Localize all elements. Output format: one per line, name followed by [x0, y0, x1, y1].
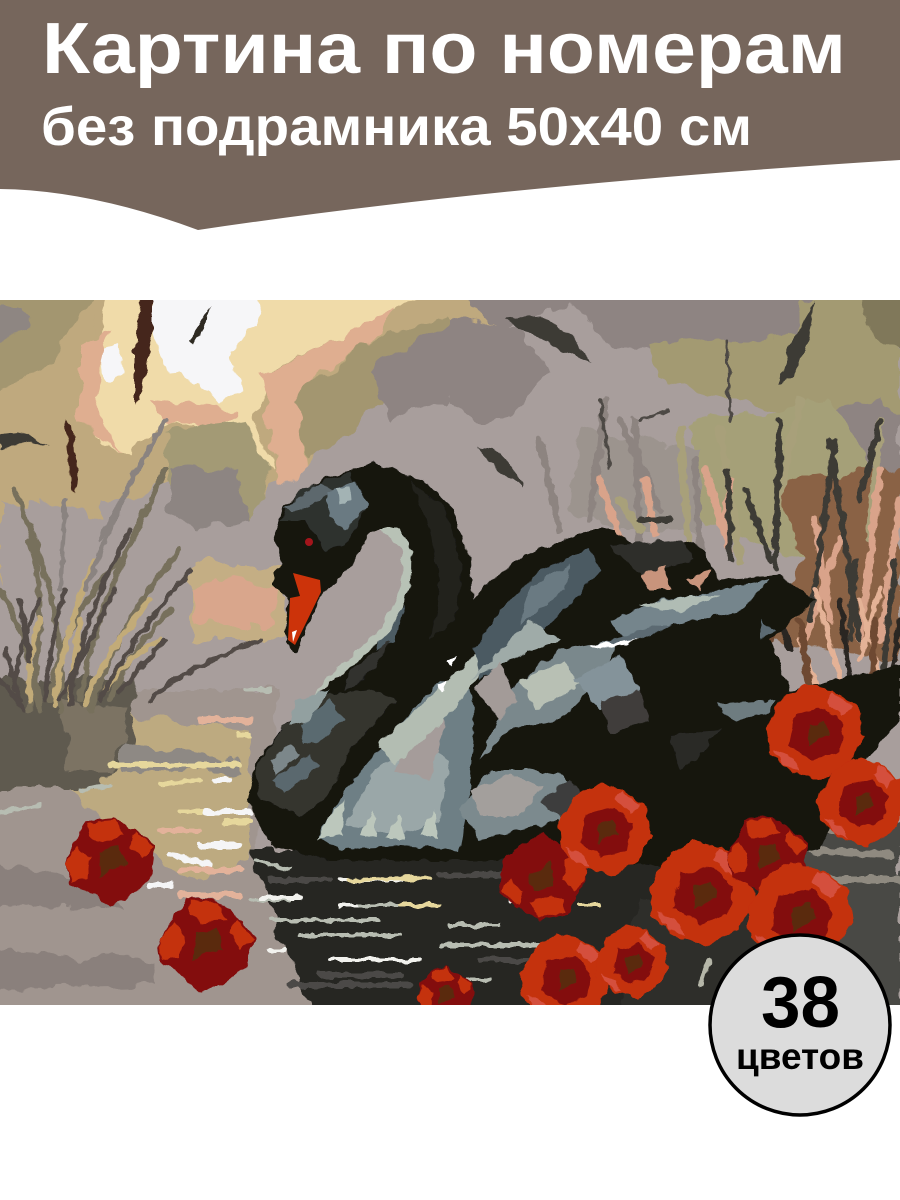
badge label: цветов	[736, 1036, 864, 1077]
breast feathers	[255, 690, 395, 815]
badge number: 38	[761, 963, 840, 1043]
head highlights	[280, 472, 365, 550]
fan of grey feathers	[318, 680, 475, 850]
neck pale rim	[310, 527, 412, 700]
swan	[248, 463, 900, 870]
white glints	[438, 656, 458, 692]
right reeds background	[540, 400, 700, 550]
flower	[649, 840, 755, 946]
left grass clump	[0, 470, 180, 710]
badge: 38 colours	[710, 935, 890, 1115]
flower	[746, 862, 854, 944]
sky and background colours	[0, 290, 900, 660]
flower	[727, 816, 807, 897]
header banner	[0, 0, 900, 230]
flower	[519, 933, 608, 1005]
reeds and grasses	[0, 340, 900, 710]
flower	[499, 832, 587, 920]
title: Картина по номерам	[42, 9, 846, 89]
subtitle: без подрамника 50х40 см	[41, 97, 752, 157]
water highlights	[0, 690, 900, 1000]
eye	[305, 538, 313, 546]
flower	[818, 758, 900, 846]
flower	[157, 896, 256, 993]
cattails	[0, 298, 210, 495]
flower	[416, 965, 475, 1005]
swan body and neck silhouette	[248, 463, 900, 870]
poppies	[65, 684, 900, 1024]
beak	[288, 573, 321, 645]
neck shadows	[410, 480, 462, 640]
flower	[559, 784, 651, 876]
flower	[767, 684, 863, 780]
flower	[65, 817, 155, 907]
lake water	[0, 680, 900, 1020]
flower	[596, 926, 668, 998]
painting: black swan on a lake	[0, 290, 900, 1024]
upper wing	[475, 548, 600, 680]
